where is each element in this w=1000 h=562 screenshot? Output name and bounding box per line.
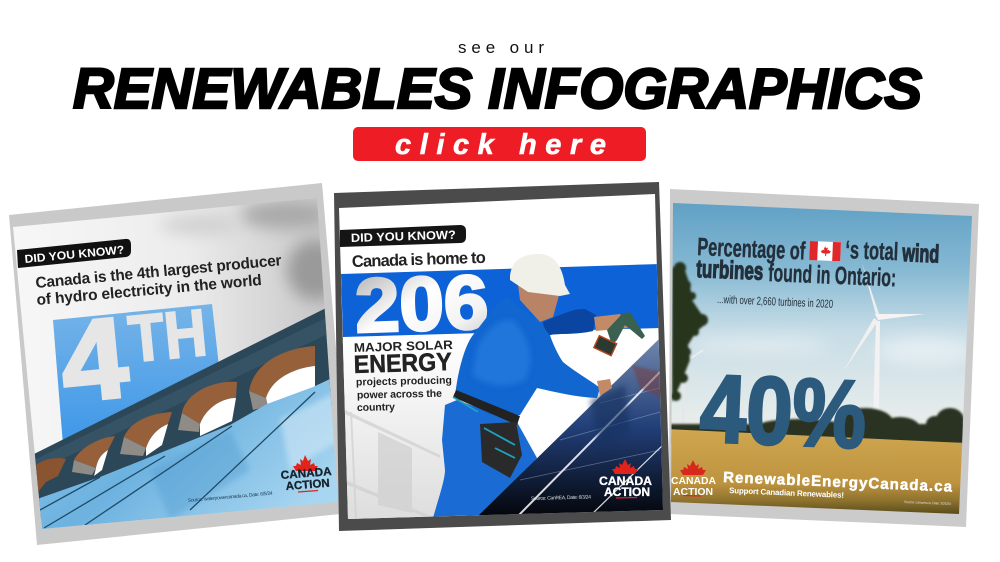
- panel: wind turbine card: [665, 189, 980, 527]
- logo: Canada Action: [671, 460, 716, 498]
- badge: did you know: DID YOU KNOW?: [351, 228, 456, 245]
- title: RENEWABLES INFOGRAPHICS: [73, 57, 922, 121]
- hard hat: [510, 254, 570, 296]
- left tree: [671, 262, 708, 402]
- description text: MAJOR SOLAR: [354, 338, 453, 355]
- headline: ‘s total: [845, 236, 899, 266]
- badge: did you know: DID YOU KNOW?: [24, 244, 125, 266]
- icon: Canadian flag: [809, 241, 841, 261]
- worker legs: [433, 400, 537, 518]
- logo: Canada Action: CANADA: [280, 466, 332, 482]
- dam arches: [36, 346, 315, 492]
- button: click here: [353, 127, 646, 161]
- worker torso and arms: [456, 318, 599, 415]
- logo: Canada Action: CANADA: [599, 476, 652, 488]
- wind turbine: [843, 263, 925, 416]
- headline: wind: [901, 239, 940, 269]
- solar panel: [478, 338, 670, 516]
- stat: 4TH: [62, 308, 206, 400]
- description text: ENERGY: [353, 348, 452, 379]
- headline: Canada is the 4th largest producer: [35, 252, 282, 292]
- headline: turbines: [696, 255, 764, 286]
- headline: of hydro electricity in the world: [36, 272, 262, 309]
- description text: country: [357, 401, 395, 414]
- worker: [453, 254, 645, 478]
- headline: [696, 233, 940, 292]
- tool belt: [453, 390, 522, 478]
- headline: found in Ontario:: [768, 259, 897, 292]
- blue stat block: [53, 304, 225, 445]
- building illustration: [345, 410, 440, 523]
- logo: Canada Action: ACTION: [673, 486, 713, 498]
- stat: 206: 206: [354, 260, 489, 349]
- see our kicker: see our: [458, 38, 544, 57]
- badge: did you know: [340, 225, 466, 247]
- source note: Source: CanREA, Date: 6/3/24: [531, 494, 591, 502]
- distant wind turbine: [682, 350, 704, 390]
- drill: [594, 312, 645, 356]
- button: click here: click here: [395, 129, 606, 161]
- website: RenewableEnergyCanada.ca: [723, 469, 953, 496]
- source note: Source: canwea.ca, Date: 3/25/24: [904, 500, 951, 506]
- panel: hydro electricity card: [0, 183, 350, 545]
- stat: 40%: 40%: [698, 355, 868, 469]
- white background: [335, 190, 670, 525]
- logo: Canada Action: CANADA: [671, 475, 716, 487]
- sky: [665, 198, 980, 438]
- description text: [353, 338, 453, 414]
- source note: Source: waterpowercanada.ca, Date: 6/5/24: [188, 491, 273, 504]
- dam wall: [30, 306, 345, 520]
- water spillway: [39, 379, 338, 529]
- hands and face: [594, 314, 628, 331]
- badge: did you know: [17, 239, 131, 268]
- stat: 4TH: TH: [125, 295, 210, 376]
- subheading: ...with over 2,660 turbines in 2020: [717, 294, 833, 311]
- tagline: Support Canadian Renewables!: [729, 486, 844, 500]
- headline: Percentage of: [697, 233, 806, 266]
- blue band: [341, 264, 660, 337]
- distant treeline: [665, 408, 965, 444]
- logo: Canada Action: ACTION: [604, 487, 650, 499]
- logo: Canada Action: [599, 459, 652, 499]
- description text: power across the: [357, 388, 442, 401]
- field: [665, 429, 965, 520]
- logo: Canada Action: ACTION: [285, 478, 330, 493]
- headline: Canada is home to: [352, 249, 486, 271]
- logo: Canada Action: [280, 455, 332, 493]
- panel: solar energy card: [334, 182, 671, 531]
- description text: projects producing: [356, 374, 452, 388]
- stat: 4TH: 4: [55, 294, 133, 427]
- sky background: [13, 204, 290, 529]
